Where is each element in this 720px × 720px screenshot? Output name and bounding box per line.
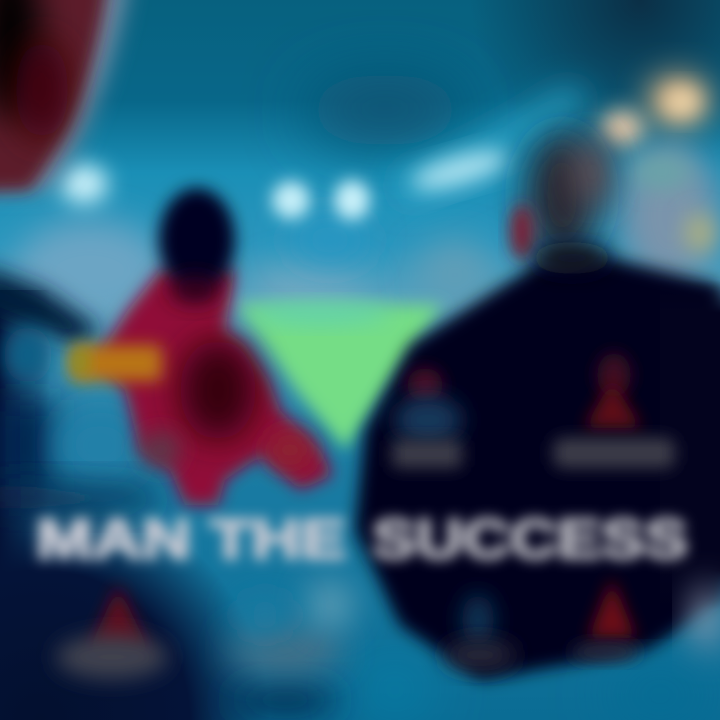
- blurred foreground head, top left: [0, 0, 130, 192]
- stadium floodlights: [60, 76, 715, 253]
- title: SUCCESS: [372, 507, 688, 570]
- player in red shirt: [95, 188, 333, 505]
- icon card: lower left: [56, 585, 168, 679]
- title: [36, 507, 688, 570]
- icon card: lower right: [571, 578, 639, 661]
- lower centre crowd figure: [227, 581, 354, 672]
- icon card: upper centre: [392, 368, 462, 468]
- man in dark jacket: [355, 133, 720, 680]
- icon card: lower centre: [444, 594, 516, 669]
- foreground crowd, left: [0, 265, 429, 720]
- title: MAN THE: [36, 507, 346, 570]
- icon card: upper right: [553, 353, 675, 468]
- yellow sleeve patch: [70, 345, 162, 381]
- lower right crowd highlight: [610, 584, 720, 715]
- football pitch: [238, 304, 442, 450]
